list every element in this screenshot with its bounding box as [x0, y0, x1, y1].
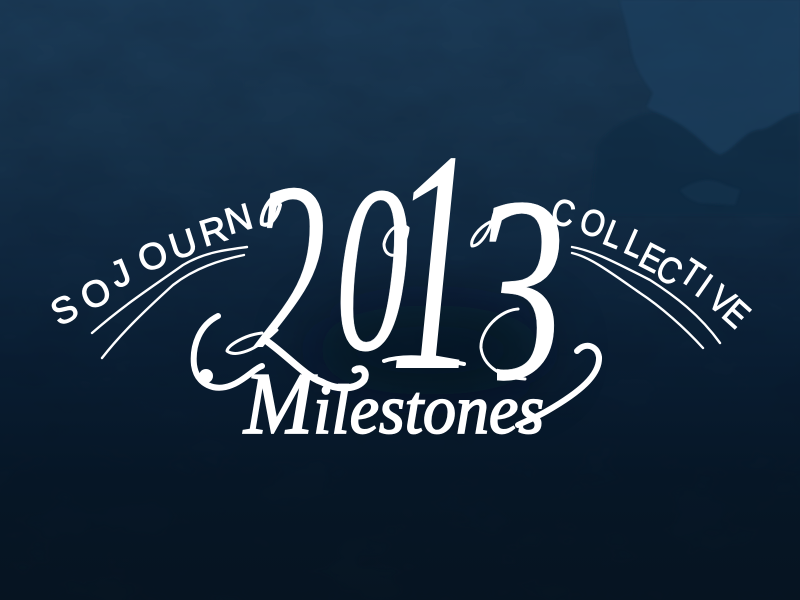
- heading: Sojourn: U: [164, 220, 202, 268]
- flourish: left swash dot: [199, 369, 213, 383]
- heading: Sojourn: [44, 196, 257, 334]
- heading: Collective: T: [672, 252, 711, 296]
- flourish: right swash: [518, 346, 599, 425]
- year: 2013: 0: [335, 137, 409, 401]
- heading: Collective: C: [649, 247, 689, 294]
- underline rules: Sojourn: [92, 247, 247, 358]
- heading: Collective: L: [619, 222, 651, 266]
- underline rules: Collective: [572, 247, 720, 348]
- heading: Collective: E: [714, 292, 757, 336]
- heading: Sojourn: R: [195, 208, 232, 255]
- year: 2013: [253, 158, 560, 381]
- heading: Sojourn: O: [132, 232, 173, 280]
- heading: Sojourn: N: [220, 196, 257, 242]
- heading: Collective: L: [598, 213, 629, 257]
- flourish: left swash: [194, 316, 262, 388]
- heading: Collective: C: [547, 191, 579, 236]
- heading: Sojourn: O: [74, 269, 117, 318]
- heading: Collective: I: [688, 267, 719, 306]
- heading: Collective: V: [700, 278, 742, 323]
- year: 2013: 2: [250, 126, 326, 427]
- heading: Sojourn: S: [44, 286, 85, 334]
- heading: Collective: O: [575, 200, 611, 247]
- title: Milestones: Milestones: [242, 356, 544, 453]
- flourish: numeral swashes: [227, 192, 525, 388]
- heading: Collective: [547, 191, 757, 336]
- heading: Collective: E: [633, 235, 670, 281]
- heading: Sojourn: J: [104, 251, 137, 296]
- year: 2013: 1: [389, 84, 479, 437]
- year: 2013: 3: [469, 142, 566, 435]
